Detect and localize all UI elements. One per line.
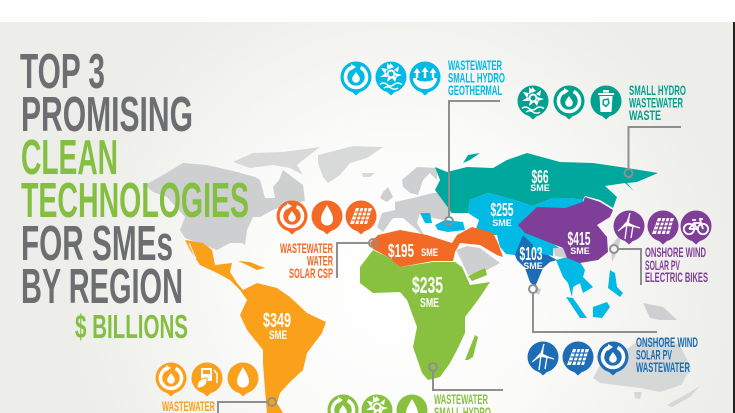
label: Central Asia technologies [448, 57, 505, 98]
map: China [518, 197, 613, 263]
label: Africa technologies: WASTEWATER [434, 391, 488, 407]
value: Africa: SME [420, 295, 439, 310]
value: China: SME [570, 246, 590, 256]
icon: water [228, 362, 258, 396]
icon: small hydro [518, 86, 548, 120]
map: Nepal [553, 248, 567, 258]
label: Africa technologies [434, 391, 491, 413]
value: China: $415 [568, 229, 590, 249]
value: Russia [530, 167, 550, 193]
label: Central Asia technologies: SMALL HYDRO [448, 70, 505, 86]
label: Central Asia technologies: GEOTHERMAL [448, 82, 502, 98]
value: India: SME [523, 261, 543, 271]
label: Russia technologies [629, 82, 686, 123]
icon: electric bike [680, 210, 712, 244]
icon: waste [590, 86, 622, 120]
map: Africa [360, 250, 490, 380]
map: Australia [593, 337, 700, 407]
icon: wastewater [554, 86, 584, 120]
label: Russia technologies: WASTEWATER [629, 94, 683, 110]
label: Central Asia technologies: WASTEWATER [448, 57, 502, 73]
value: Africa [412, 272, 443, 310]
icon: onshore wind [614, 210, 644, 244]
label: Russia technologies: SMALL HYDRO [629, 82, 686, 98]
title line: BY REGION: BY REGION [21, 260, 183, 314]
value: Middle East and North Africa: SME [421, 247, 438, 259]
icon: solar PV [648, 210, 678, 244]
title line: CLEAN: CLEAN [21, 131, 118, 185]
icon: wastewater [276, 200, 308, 234]
subtitle: $ BILLIONS: $ BILLIONS [75, 308, 188, 345]
icons: Middle East and North Africa [276, 200, 376, 234]
label: China technologies [645, 244, 708, 285]
icon: onshore wind [528, 342, 558, 376]
value: Central Asia [490, 200, 514, 228]
value: Russia: SME [530, 183, 550, 193]
value: Middle East and North Africa: $195 [388, 241, 414, 261]
map: Russia [435, 153, 658, 213]
map: North Africa and Middle East [370, 227, 503, 267]
icons: China [614, 210, 712, 244]
connector lines and markers [218, 101, 681, 413]
icon: small hydro [362, 394, 392, 413]
value: Latin America: $349 [263, 310, 291, 332]
icon: solar PV [562, 342, 594, 376]
label: India technologies [636, 334, 698, 375]
map: Arabia and Asian islands [456, 232, 677, 320]
label: Russia technologies: WASTE [629, 107, 661, 123]
value: Central Asia: SME [492, 218, 512, 228]
icons: Russia [518, 86, 622, 120]
icon: solar CSP [346, 200, 376, 234]
icons: India [528, 342, 628, 376]
map: Greenland and Iceland [318, 146, 383, 183]
map: Europe [377, 167, 452, 240]
icon: biofuel pump [192, 362, 222, 396]
title [20, 45, 249, 345]
icons: Latin America [156, 362, 258, 396]
value: India [520, 244, 543, 271]
icon: wastewater [340, 62, 372, 96]
label: India technologies: WASTEWATER [636, 359, 690, 375]
map: Canadian Arctic [233, 147, 320, 175]
title line: TOP 3: TOP 3 [20, 45, 105, 99]
value: Central Asia: $255 [490, 200, 514, 220]
map: Latin America [185, 240, 326, 413]
icon: wastewater [156, 362, 186, 396]
label: India technologies: SOLAR PV [636, 346, 672, 362]
value: India: $103 [520, 244, 542, 264]
title line: FOR SMEs: FOR SMEs [21, 217, 173, 271]
world map [145, 146, 700, 413]
map: Baja California gulf [189, 243, 196, 259]
icons: Africa [328, 394, 428, 413]
label: Middle East and North Africa technologies: WATER [307, 252, 333, 268]
label: China technologies: SOLAR PV [645, 257, 680, 273]
icon: geothermal [410, 62, 440, 96]
icons: Central Asia [340, 62, 440, 96]
icon: water [396, 394, 428, 413]
map: India [515, 235, 557, 287]
label: Middle East and North Africa technologies: WASTEWATER [280, 240, 333, 256]
title line: TECHNOLOGIES: TECHNOLOGIES [21, 174, 249, 228]
label: Middle East and North Africa technologies [280, 240, 333, 281]
value: China [568, 229, 590, 256]
icon: small hydro [376, 62, 406, 96]
icon: wastewater [328, 394, 358, 413]
value: Africa: $235 [412, 272, 443, 298]
value: Latin America: SME [269, 328, 287, 342]
value: Latin America [263, 310, 291, 342]
icon: water [312, 200, 342, 234]
title line: PROMISING: PROMISING [21, 88, 193, 142]
icon: wastewater [598, 342, 628, 376]
label: Middle East and North Africa technologies: SOLAR CSP [289, 265, 333, 281]
value: Russia: $66 [532, 167, 548, 187]
map: Central and SE Asia [420, 193, 623, 318]
map: North America [145, 163, 305, 250]
